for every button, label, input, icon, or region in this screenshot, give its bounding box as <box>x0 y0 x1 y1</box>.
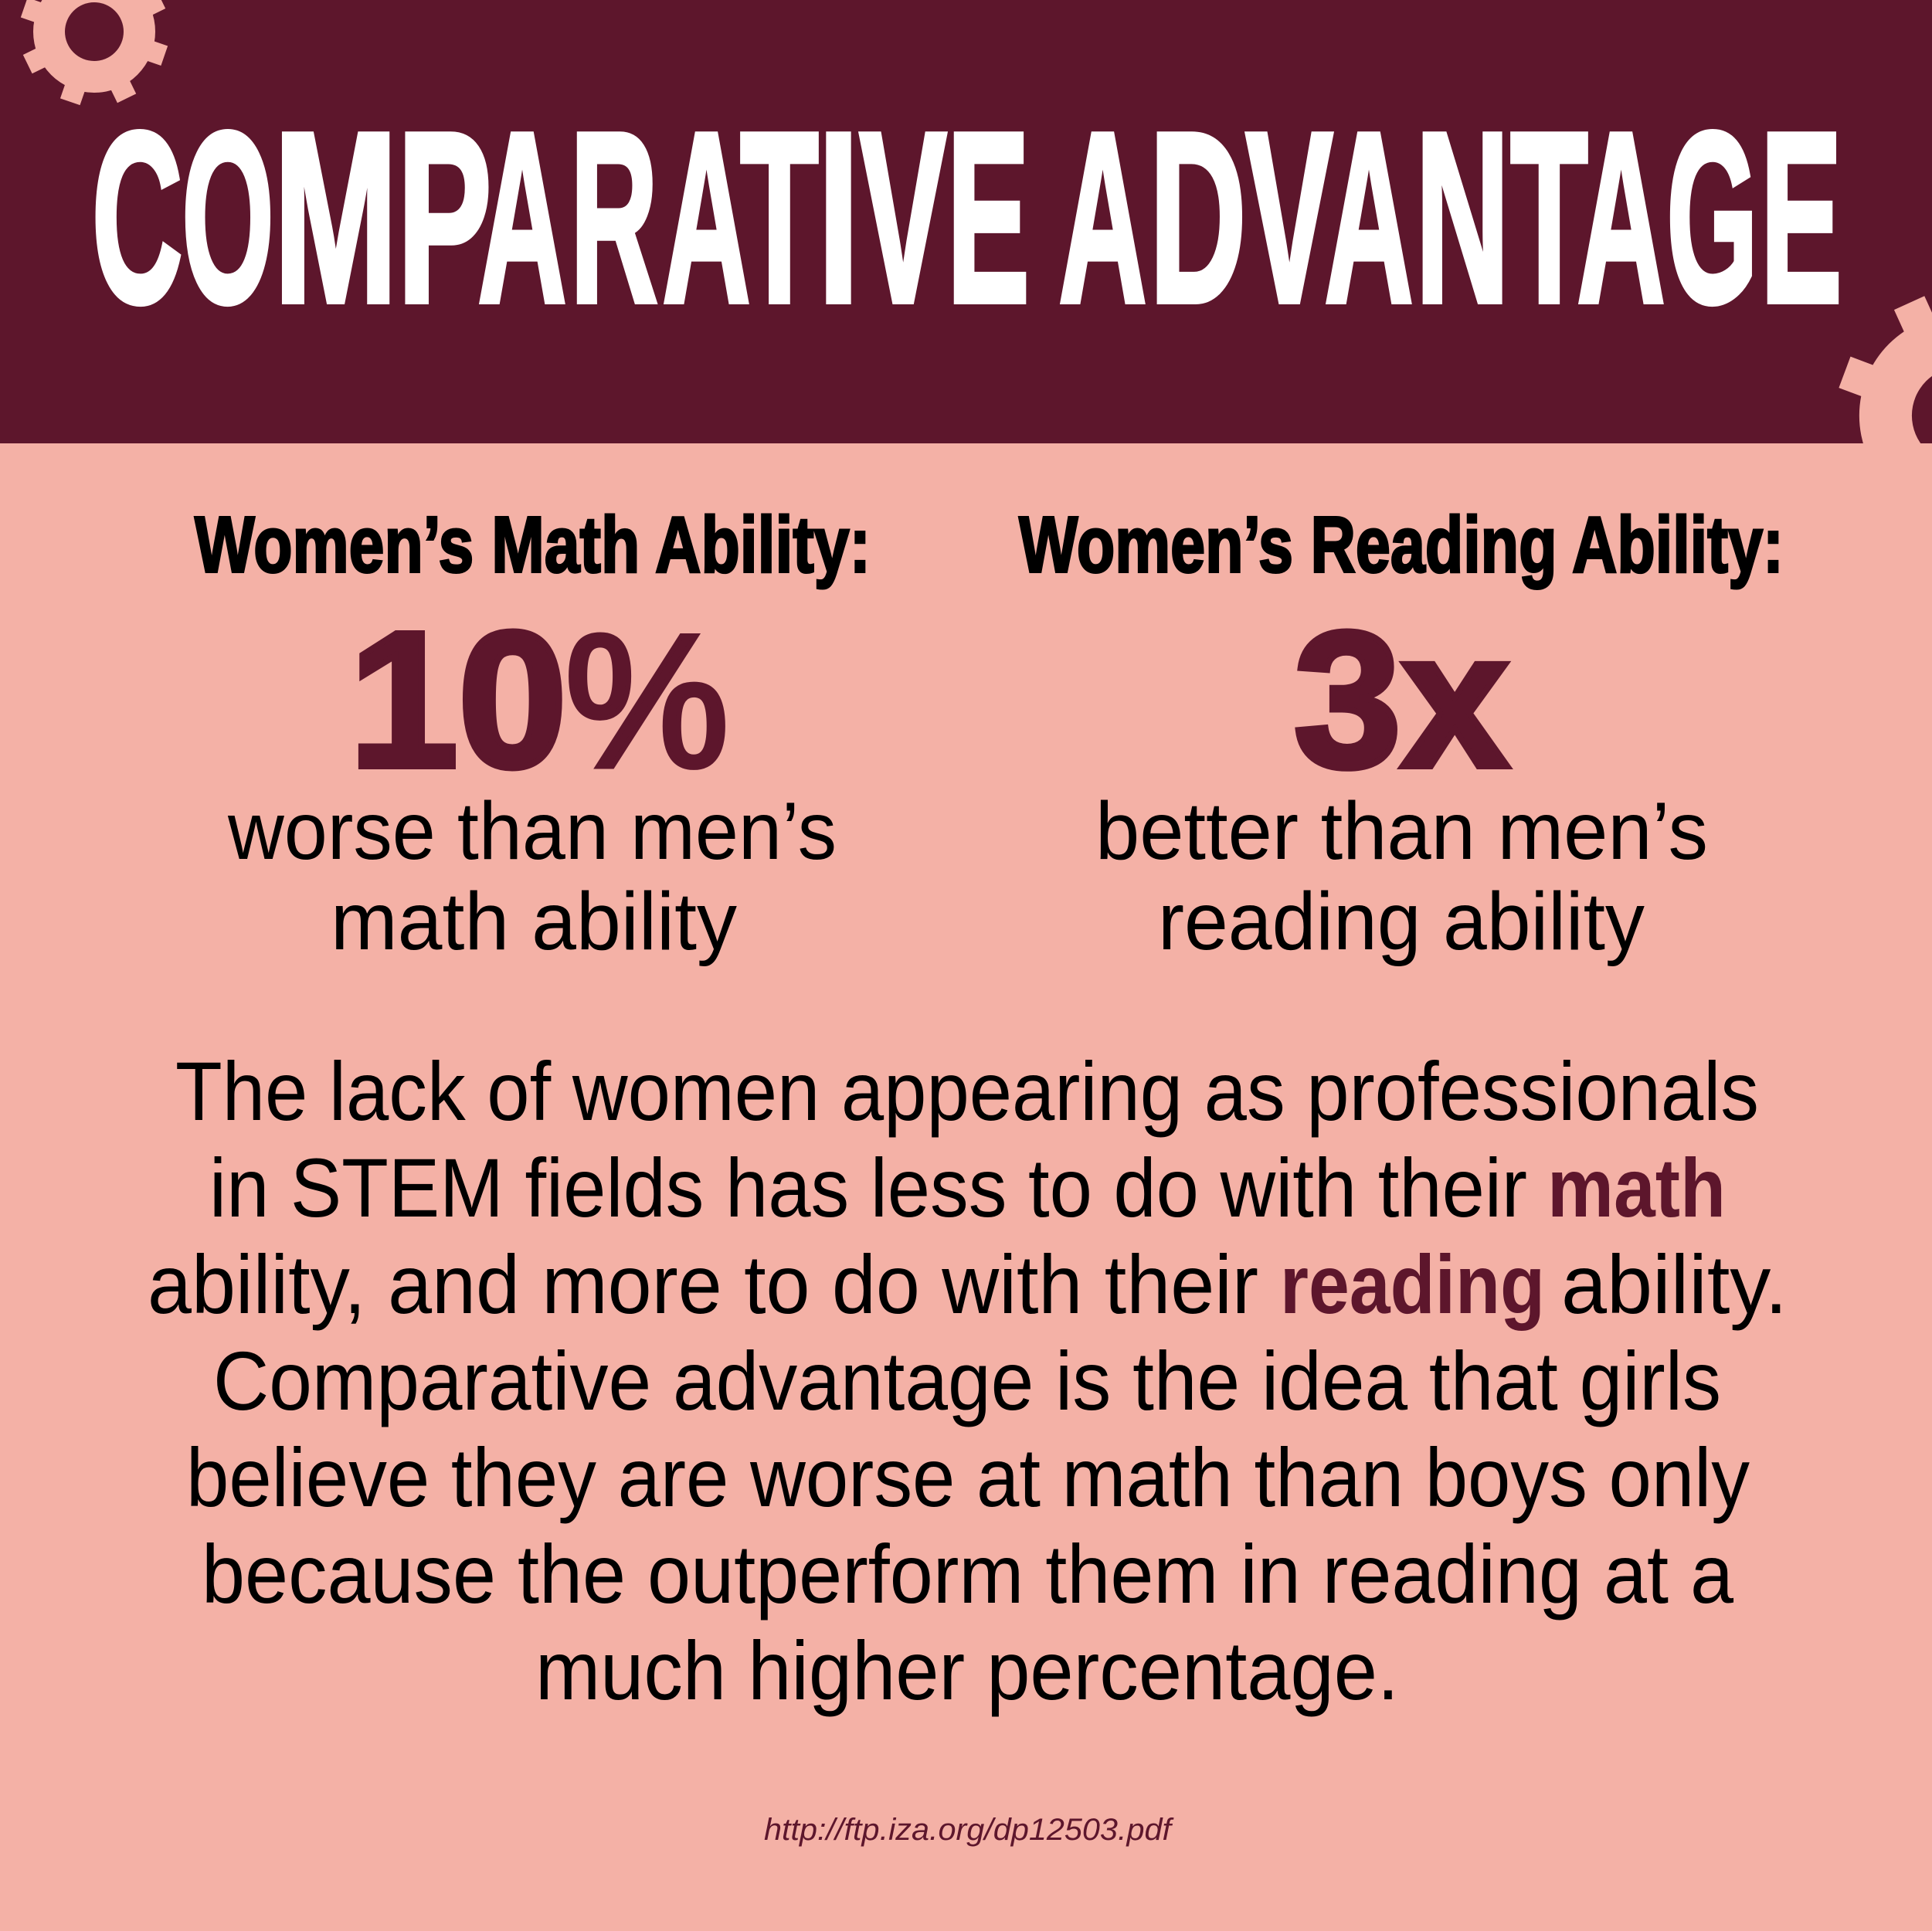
icon: gear top left <box>21 0 168 105</box>
body paragraph: because the outperform them in reading at a <box>202 1527 1734 1620</box>
title: V <box>1245 82 1333 354</box>
body paragraph: The lack of women appearing as professionals <box>175 1044 1759 1138</box>
title: E <box>1761 82 1842 354</box>
panel: reading ability <box>1019 501 1784 967</box>
caption: reading: better than men’s <box>1095 786 1708 877</box>
title: O <box>182 82 274 354</box>
title: A <box>1058 82 1146 354</box>
stat: 3x: 3x <box>1294 592 1509 807</box>
caption: math: math ability <box>331 876 737 967</box>
title: A <box>477 82 567 354</box>
body paragraph: believe they are worse at math than boys only <box>186 1430 1750 1524</box>
title: M <box>273 82 398 354</box>
title: A <box>1324 82 1414 354</box>
stat: 10%: 10 <box>349 592 567 807</box>
title: C <box>92 82 183 354</box>
title: E <box>947 82 1030 354</box>
title: T <box>1510 82 1588 354</box>
title: T <box>740 82 819 354</box>
icon: gear right edge <box>1839 294 1932 517</box>
body paragraph: much higher percentage. <box>535 1624 1399 1717</box>
body paragraph <box>148 1044 1788 1717</box>
header band <box>0 0 1932 443</box>
body paragraph: ability. <box>1561 1237 1788 1331</box>
title: D <box>1149 82 1246 354</box>
caption: reading: reading ability <box>1158 876 1645 967</box>
title: V <box>859 82 947 354</box>
body paragraph: Comparative advantage is the idea that girls <box>213 1334 1721 1427</box>
title: G <box>1666 82 1758 354</box>
body paragraph: reading <box>1280 1237 1545 1331</box>
stat: 10%: % <box>565 595 729 806</box>
caption: math <box>227 786 837 967</box>
caption: reading <box>1095 786 1708 967</box>
pink content background <box>0 443 1932 1931</box>
body paragraph: ability, and more to do with their <box>148 1237 1258 1331</box>
caption: math: worse than men’s <box>227 786 837 877</box>
title: N <box>1415 82 1509 354</box>
heading: math: Women’s Math Ability: <box>195 501 871 589</box>
title: A <box>663 82 751 354</box>
title: A <box>1577 82 1665 354</box>
source link: http://ftp.iza.org/dp12503.pdf <box>764 1813 1174 1847</box>
panel: math ability <box>195 501 871 967</box>
body paragraph: math <box>1547 1141 1726 1234</box>
title: I <box>817 82 859 354</box>
title: R <box>570 82 658 354</box>
title: P <box>397 82 492 354</box>
body paragraph: in STEM fields has less to do with their <box>209 1141 1527 1234</box>
